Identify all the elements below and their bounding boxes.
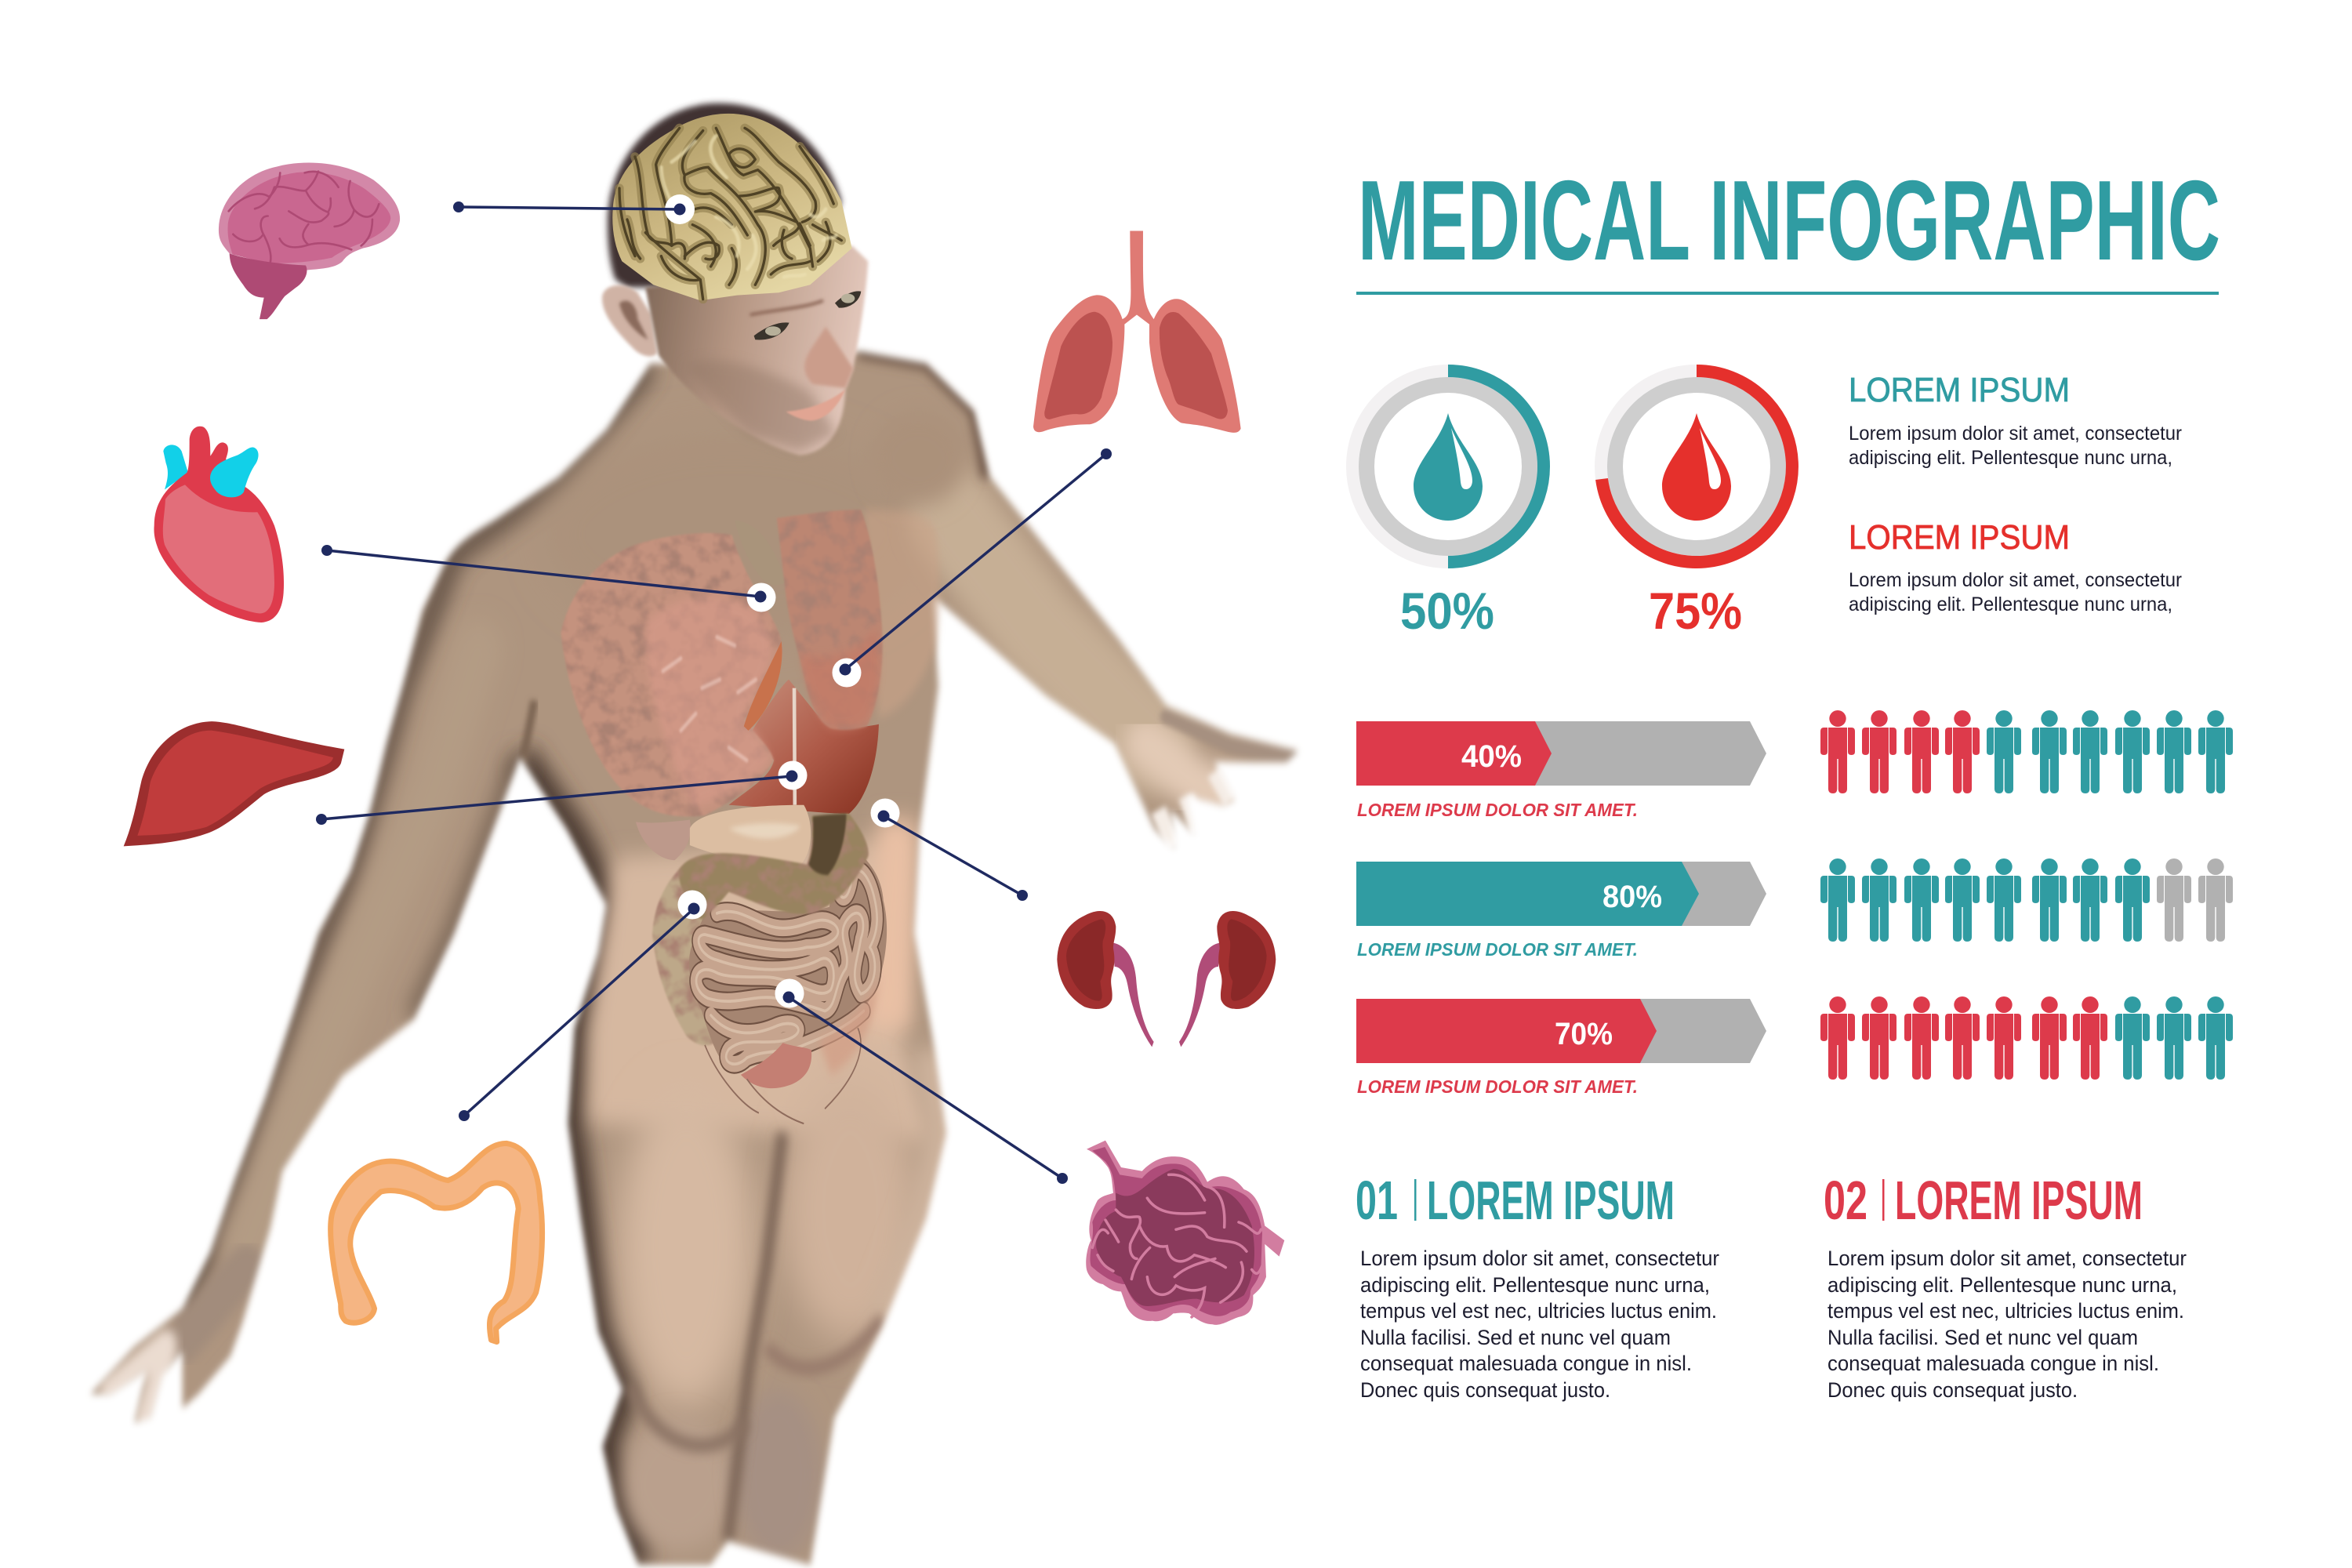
people row: 8 of 10 (1820, 858, 2233, 942)
marker: large intestine (459, 891, 707, 1121)
progress bar: 40% (1356, 721, 1766, 820)
abdomen (590, 838, 935, 1142)
body text 02: Lorem ipsum dolor sit amet, consectetur (1828, 1247, 2187, 1270)
ear (602, 285, 657, 357)
kidney (636, 820, 691, 860)
eyes (754, 322, 789, 340)
gauge: 50% water (1352, 371, 1544, 640)
hair shadow (608, 103, 841, 288)
face (645, 245, 868, 456)
section 01 (1356, 1170, 1719, 1402)
upper chest (536, 447, 599, 508)
right arm (950, 515, 1150, 743)
dark shading along left contours (183, 364, 651, 1308)
progress bar: 80%: 80% (1602, 880, 1662, 914)
left kidney (1057, 911, 1154, 1047)
body skin (89, 346, 1300, 1568)
text block: red lorem (1849, 518, 2182, 615)
human figure with internal organs (38, 103, 1359, 1568)
heading 02: 02 (1824, 1170, 1867, 1231)
trachea tissue (735, 521, 786, 585)
gauge: 75% blood (1601, 371, 1792, 640)
body text 02: Donec quis consequat justo. (1828, 1378, 2078, 1402)
mouth (786, 390, 845, 421)
marker: liver (316, 760, 808, 825)
head (602, 103, 868, 456)
transverse colon (678, 814, 869, 920)
marker: lungs (833, 448, 1112, 687)
translucent chest overlay (864, 510, 939, 718)
body text 01: adipiscing elit. Pellentesque nunc urna, (1360, 1273, 1710, 1297)
exposed brain (612, 114, 852, 300)
chest organs (561, 510, 939, 817)
small intestine (689, 845, 887, 1073)
progress bar: 70% (1356, 999, 1766, 1097)
text block: red lorem: LOREM IPSUM (1849, 518, 2070, 557)
icon: small intestine (1086, 1141, 1284, 1325)
leader lines and markers (316, 194, 1112, 1184)
marker: heart (321, 545, 776, 612)
progress bar: 70%: 70% (1555, 1017, 1613, 1051)
left lung (777, 510, 883, 730)
abdominal organs (636, 805, 887, 1123)
section 02 (1824, 1170, 2187, 1402)
progress bar: 40%: LOREM IPSUM DOLOR SIT AMET. (1357, 800, 1638, 820)
progress bar: 40%: 40% (1461, 739, 1522, 774)
text block: teal lorem: adipiscing elit. Pellentesque nunc urna, (1849, 447, 2172, 469)
marker: brain (453, 194, 695, 224)
marker: small intestine (775, 978, 1068, 1184)
progress bar: 70%: LOREM IPSUM DOLOR SIT AMET. (1357, 1076, 1638, 1097)
text block: red lorem: adipiscing elit. Pellentesque nunc urna, (1849, 593, 2172, 615)
icon: heart (154, 426, 284, 622)
heart and diaphragm (729, 680, 879, 814)
text block: red lorem: Lorem ipsum dolor sit amet, consectetur (1849, 569, 2182, 591)
gauge: 75% blood: 75% (1649, 582, 1742, 640)
orange lobe (744, 641, 782, 731)
bladder (741, 1043, 811, 1088)
heading 01: LOREM IPSUM (1427, 1170, 1675, 1231)
body text 01 (1360, 1247, 1719, 1402)
body text 02: adipiscing elit. Pellentesque nunc urna, (1828, 1273, 2177, 1297)
heading 01: 01 (1356, 1170, 1398, 1231)
body text 02 (1828, 1247, 2187, 1402)
text block: teal lorem: LOREM IPSUM (1849, 371, 2070, 409)
blood vessels (705, 1028, 861, 1123)
right lung (561, 533, 782, 817)
body text 01: Lorem ipsum dolor sit amet, consectetur (1360, 1247, 1719, 1270)
heading 02 (1824, 1170, 2143, 1231)
text block: teal lorem: Lorem ipsum dolor sit amet, consectetur (1849, 423, 2182, 445)
icon: brain (219, 162, 400, 319)
thighs and knees (619, 1085, 754, 1408)
icon: lungs (1033, 230, 1241, 433)
progress bar: 80%: LOREM IPSUM DOLOR SIT AMET. (1357, 939, 1638, 960)
shoulders (858, 351, 986, 477)
people row: 7 of 10 (1820, 996, 2233, 1080)
body text 02: Nulla facilisi. Sed et nunc vel quam (1828, 1326, 2138, 1349)
body text 02: tempus vel est nec, ultricies luctus enim. (1828, 1299, 2184, 1323)
lower belly blush (818, 977, 879, 1075)
body text 02: consequat malesuada congue in nisl. (1828, 1352, 2159, 1375)
gauge: 50% water: 50% (1400, 582, 1494, 640)
text block: teal lorem (1849, 371, 2182, 469)
icon: kidneys (1057, 911, 1276, 1047)
heading 01 (1356, 1170, 1675, 1231)
body text 01: consequat malesuada congue in nisl. (1360, 1352, 1692, 1375)
icon: liver (124, 721, 344, 846)
right kidney (1179, 911, 1276, 1047)
icon: large intestine (331, 1143, 543, 1342)
stomach (690, 805, 811, 866)
heading 02: LOREM IPSUM (1895, 1170, 2143, 1231)
progress bar: 80% (1356, 862, 1766, 960)
body text 01: tempus vel est nec, ultricies luctus enim. (1360, 1299, 1717, 1323)
body text 01: Donec quis consequat justo. (1360, 1378, 1610, 1402)
body text 01: Nulla facilisi. Sed et nunc vel quam (1360, 1326, 1671, 1349)
marker: kidneys (870, 798, 1028, 901)
people row: 4 of 10 (1820, 710, 2233, 793)
ascending colon (652, 871, 717, 1045)
left arm light (215, 858, 381, 1258)
